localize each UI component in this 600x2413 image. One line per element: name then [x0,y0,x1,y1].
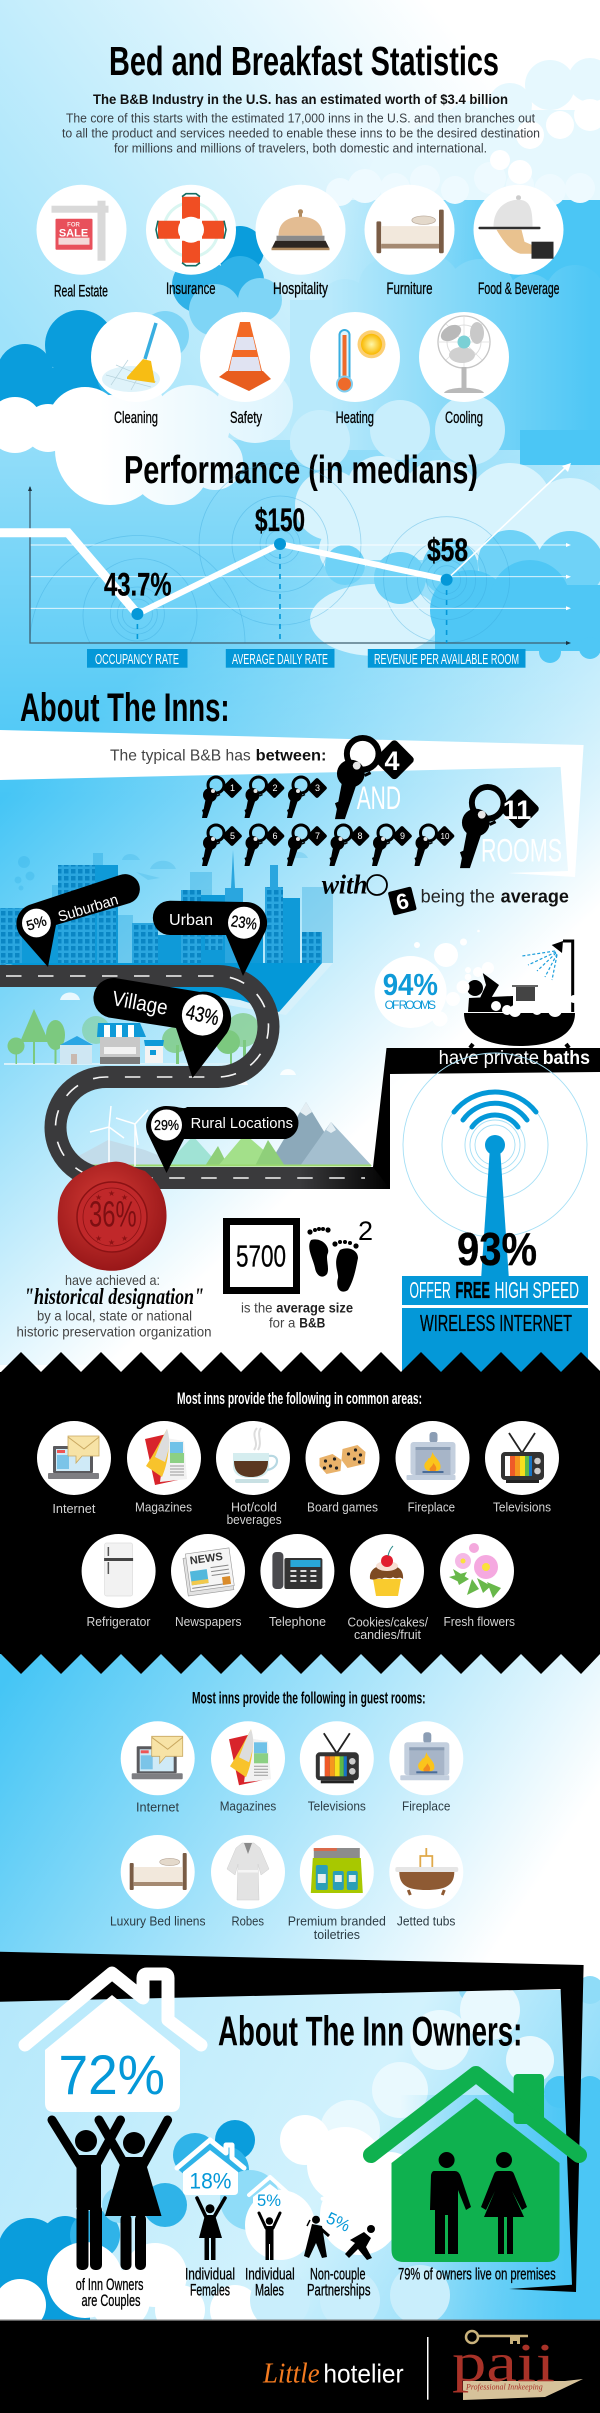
label: couples: of Inn Owners [76,2275,144,2294]
label: cleaning: Cleaning [114,408,158,427]
amenity: hot and cold beverages: beverages [227,1512,282,1527]
text: typical B&B has between: The typical B&B has [110,748,251,765]
amenity: jetted tubs: Jetted tubs [397,1914,456,1929]
label: individual males: Males [255,2281,284,2300]
key chain: between 4 and 11 rooms: 7 [315,831,320,841]
key chain: between 4 and 11 rooms: 10 [441,832,450,841]
white house: 72%: 72% [58,2043,165,2106]
key chain: between 4 and 11 rooms: 1 [230,783,235,793]
white house: 72% [25,1973,201,2112]
amenity: guest internet: Internet [136,1800,179,1815]
text: average size: B&B [299,1315,325,1331]
amenity: robes: Robes [232,1914,264,1929]
pin: urban 23%: Urban [169,912,213,929]
stat: 5700 square feet: 5700 [236,1239,286,1274]
amenity: luxury bed linens [110,1835,206,1929]
stat: 94% of rooms: OF ROOMS [385,998,436,1012]
amenity: guest televisions [300,1721,374,1814]
small house: 18%: 18% [189,2169,232,2194]
amenity: cookies, cakes, candies and fruit: candies/fruit [354,1627,421,1642]
amenity: guest televisions: Televisions [308,1799,366,1814]
key chain: between 4 and 11 rooms: 2 [272,783,278,793]
logo: PAII: paii [452,2332,555,2393]
key chain: between 4 and 11 rooms: 3 [315,783,320,793]
stat: 5700 square feet: 2 [358,1216,373,1246]
stat: 93%: 93% [457,1223,537,1275]
label: heating: Heating [336,408,374,427]
pin: rural locations 29%: 29% [154,1117,179,1134]
pin: village 43% [93,978,231,1078]
green house with couple [371,2074,579,2262]
amenity: jetted tubs [389,1835,463,1929]
figure: couple with raised arms [52,2120,168,2270]
tilted house: 5% partnerships: 5% [323,2208,353,2236]
amenity: fireplace: Fireplace [408,1500,455,1515]
amenity: newspapers: Newspapers [175,1614,242,1629]
label: safety: Safety [230,408,262,427]
text: typical B&B has between [110,748,326,765]
pin: village 43%: 43% [184,1001,221,1030]
intro paragraph: The core of this starts with the estimated 17,000 inns in the U.S. and then branches out [66,110,535,125]
wax seal: 36%: 36% [89,1194,137,1235]
village scene [4,992,260,1065]
amenity: guest fireplace [389,1721,463,1814]
key chain: between 4 and 11 rooms: 4 [384,746,400,776]
label: cooling: Cooling [445,408,483,427]
bathtub illustration [414,930,578,1048]
label: couples [76,2275,144,2310]
logo: Little Hotelier: hotelier [323,2358,404,2388]
text: average size [241,1299,353,1331]
wax seal: 36% [58,1162,167,1271]
with 6 being the average: with [322,869,368,899]
amenity: fresh flowers [440,1534,515,1629]
key chain: between 4 and 11 rooms: AND [357,780,401,816]
amenity: televisions: Televisions [493,1500,551,1515]
label: hospitality: Hospitality [273,279,328,298]
line chart: performance medians [0,463,571,645]
label: individual females: Individual [185,2265,235,2284]
wax seal: 36%: ★ [95,1234,102,1243]
amenity: hot and cold beverages [216,1421,290,1527]
wax seal: 36%: ★ [108,1238,115,1247]
amenity: guest fireplace: Fireplace [402,1799,450,1814]
with 6 being the average: average [501,886,569,906]
industry sector: cooling [419,312,509,402]
heading: performance: Performance (in medians) [124,449,478,492]
amenity: fireplace [396,1421,470,1515]
industry sector: real estate [36,185,126,275]
pin: suburban 5%: 5% [24,912,48,934]
industry sector: insurance [146,185,236,275]
callout: offer free high speed [402,1276,588,1305]
label: individual females: Females [190,2281,230,2300]
amenity: newspapers [171,1534,245,1629]
key chain: between 4 and 11 rooms: 5 [230,831,235,841]
wax seal: 36%: ★ [121,1193,128,1202]
amenity: telephone [260,1534,334,1629]
industry sector: real estate: SALE [59,228,88,240]
pin: rural locations 29% [146,1106,298,1173]
rural scene [60,1069,372,1166]
with 6 being the average [322,869,569,917]
figure: individual male [259,2213,280,2260]
amenity: internet [37,1421,111,1516]
black banner: have private baths: have private [439,1048,539,1069]
small house: 5% male: 5% [257,2191,281,2210]
amenity: televisions [485,1421,559,1515]
amenity: magazines [127,1421,201,1515]
label: insurance: Insurance [166,279,216,298]
intro paragraph: to all the product and services needed to enable these inns to be the desired destination [62,125,540,140]
black banner: have private baths [373,1048,600,1189]
amenity: telephone: Telephone [269,1614,326,1629]
industry sector: furniture [364,185,454,275]
wax seal: 36%: ★ [95,1193,102,1202]
label: revenue per available room [368,649,526,668]
label: individual males [245,2265,295,2300]
subtitle: The B&B Industry in the U.S. has an estimated worth of $3.4 billion [93,91,508,107]
amenity: magazines: Magazines [135,1500,192,1515]
pin: urban 23% [153,901,267,976]
amenity: premium branded toiletries: toiletries [314,1927,360,1942]
heading: about the inns: About The Inns: [20,686,230,730]
tilted house: 5% partnerships [312,2182,373,2241]
label: couples: are Couples [82,2291,140,2310]
label: individual females [185,2265,235,2300]
amenity: cookies, cakes, candies and fruit [348,1534,428,1642]
logo: PAII: Professional Innkeeping [465,2382,543,2392]
amenity: guest internet [121,1721,195,1815]
amenity: cookies, cakes, candies and fruit: Cookies/cakes/ [348,1615,428,1630]
text: historical designation: have achieved a: [65,1272,160,1288]
white banner frame [0,730,584,877]
text: typical B&B has between: between: [256,748,326,765]
pin: village 43%: Village [110,987,169,1020]
black frame: owners [0,1952,584,2292]
black banner: have private baths: baths [543,1048,590,1069]
figures: non-couple partners [304,2216,375,2260]
footer [0,2320,600,2413]
callout: offer free high speed: OFFER [410,1277,451,1303]
stat: 94% of rooms: 94% [383,967,438,1002]
background: top sky and clouds [0,0,600,1365]
label: average daily rate: AVERAGE DAILY RATE [232,651,328,668]
amenity: board games [306,1421,380,1515]
amenity: guest magazines [211,1721,285,1814]
pin: urban 23%: 23% [230,913,258,934]
heading: guest rooms: Most inns provide the following in guest rooms: [192,1688,426,1707]
text: average size: is the [241,1299,273,1315]
heading: common areas: Most inns provide the following in common areas: [177,1389,422,1408]
pin: suburban 5%: Suburban [56,891,120,926]
small house: 18% [177,2140,244,2195]
value: average daily rate: $150 [255,502,305,538]
amenity: refrigerator [82,1534,156,1629]
amenity: robes [211,1835,285,1929]
key chain: between 4 and 11 rooms: 9 [400,831,405,841]
label: average daily rate [226,649,334,668]
label: real estate: Real Estate [54,282,108,301]
wax seal: 36%: ★ [108,1189,115,1198]
key chain: between 4 and 11 rooms: 11 [503,795,531,825]
amenity: internet: Internet [52,1501,96,1516]
intro paragraph: for millions and millions of travelers, both domestic and international. [114,140,487,155]
industry sector: heating [310,312,400,402]
figure: individual female [197,2198,225,2260]
key chain: between 4 and 11 rooms: ROOMS [481,833,562,869]
amenity: newspapers: NEWS [189,1551,224,1567]
background: owners section clouds [0,1976,600,2335]
logo: PAII [452,2331,583,2400]
text: average size: for a [269,1315,296,1331]
winding road [0,976,390,1189]
label: occupancy rate [87,649,188,668]
key chain: between 4 and 11 rooms [202,738,562,869]
text: historical designation: historic preservation organization [16,1324,212,1340]
intro paragraph [62,110,540,155]
label: individual males: Individual [245,2265,295,2284]
background: guest rooms section [0,1650,600,1970]
text: historical designation: by a local, state or national [37,1308,192,1324]
industry sector: cleaning [91,312,181,402]
pin: suburban 5% [16,874,140,967]
amenity: premium branded toiletries: Premium branded [288,1914,386,1929]
text: average size: average size [276,1299,353,1315]
key chain: between 4 and 11 rooms: 8 [357,831,363,841]
small house: 5% male [249,2177,290,2210]
label: non-couple partnerships: Non-couple [310,2265,366,2284]
callout: wireless internet [402,1308,588,1374]
with 6 being the average: 6 [393,888,411,915]
key chain: between 4 and 11 rooms: 6 [272,831,278,841]
pin: rural locations 29%: Rural Locations [191,1115,293,1132]
amenity: fresh flowers: Fresh flowers [444,1614,515,1629]
stat: 5700 square feet [226,1216,373,1292]
label: furniture: Furniture [386,279,432,298]
panel: common areas [0,1352,600,1674]
industry sector: safety [200,312,290,402]
amenity: guest magazines: Magazines [220,1799,277,1814]
industry sector: food and beverage [474,185,564,275]
value: occupancy: 43.7% [104,567,172,603]
label: non-couple partnerships: Partnerships [307,2281,370,2300]
callout: offer free high speed: FREE [455,1277,490,1303]
wifi signal panel [390,1053,600,1374]
text: historical designation [16,1272,212,1340]
wax seal: 36%: ★ [121,1234,128,1243]
with 6 being the average: being the [421,886,495,906]
industry sector: hospitality [256,185,346,275]
label: occupancy rate: OCCUPANCY RATE [95,651,179,668]
amenity: luxury bed linens: Luxury Bed linens [110,1914,206,1929]
value: revenue per available room: $58 [427,532,468,568]
logo: Little Hotelier: Little [262,2358,320,2389]
stat: 94% of rooms [375,956,447,1028]
amenity: refrigerator: Refrigerator [86,1614,151,1629]
amenity: board games: Board games [307,1500,378,1515]
logo: Little Hotelier [262,2358,404,2389]
amenity: hot and cold beverages: Hot/cold [231,1500,277,1515]
amenity: premium branded toiletries [288,1835,386,1942]
text: historical designation: "historical designation" [24,1284,204,1309]
skyline illustration [0,850,333,1015]
industry sector: real estate: FOR [67,223,80,229]
label: non-couple partnerships [307,2265,370,2300]
